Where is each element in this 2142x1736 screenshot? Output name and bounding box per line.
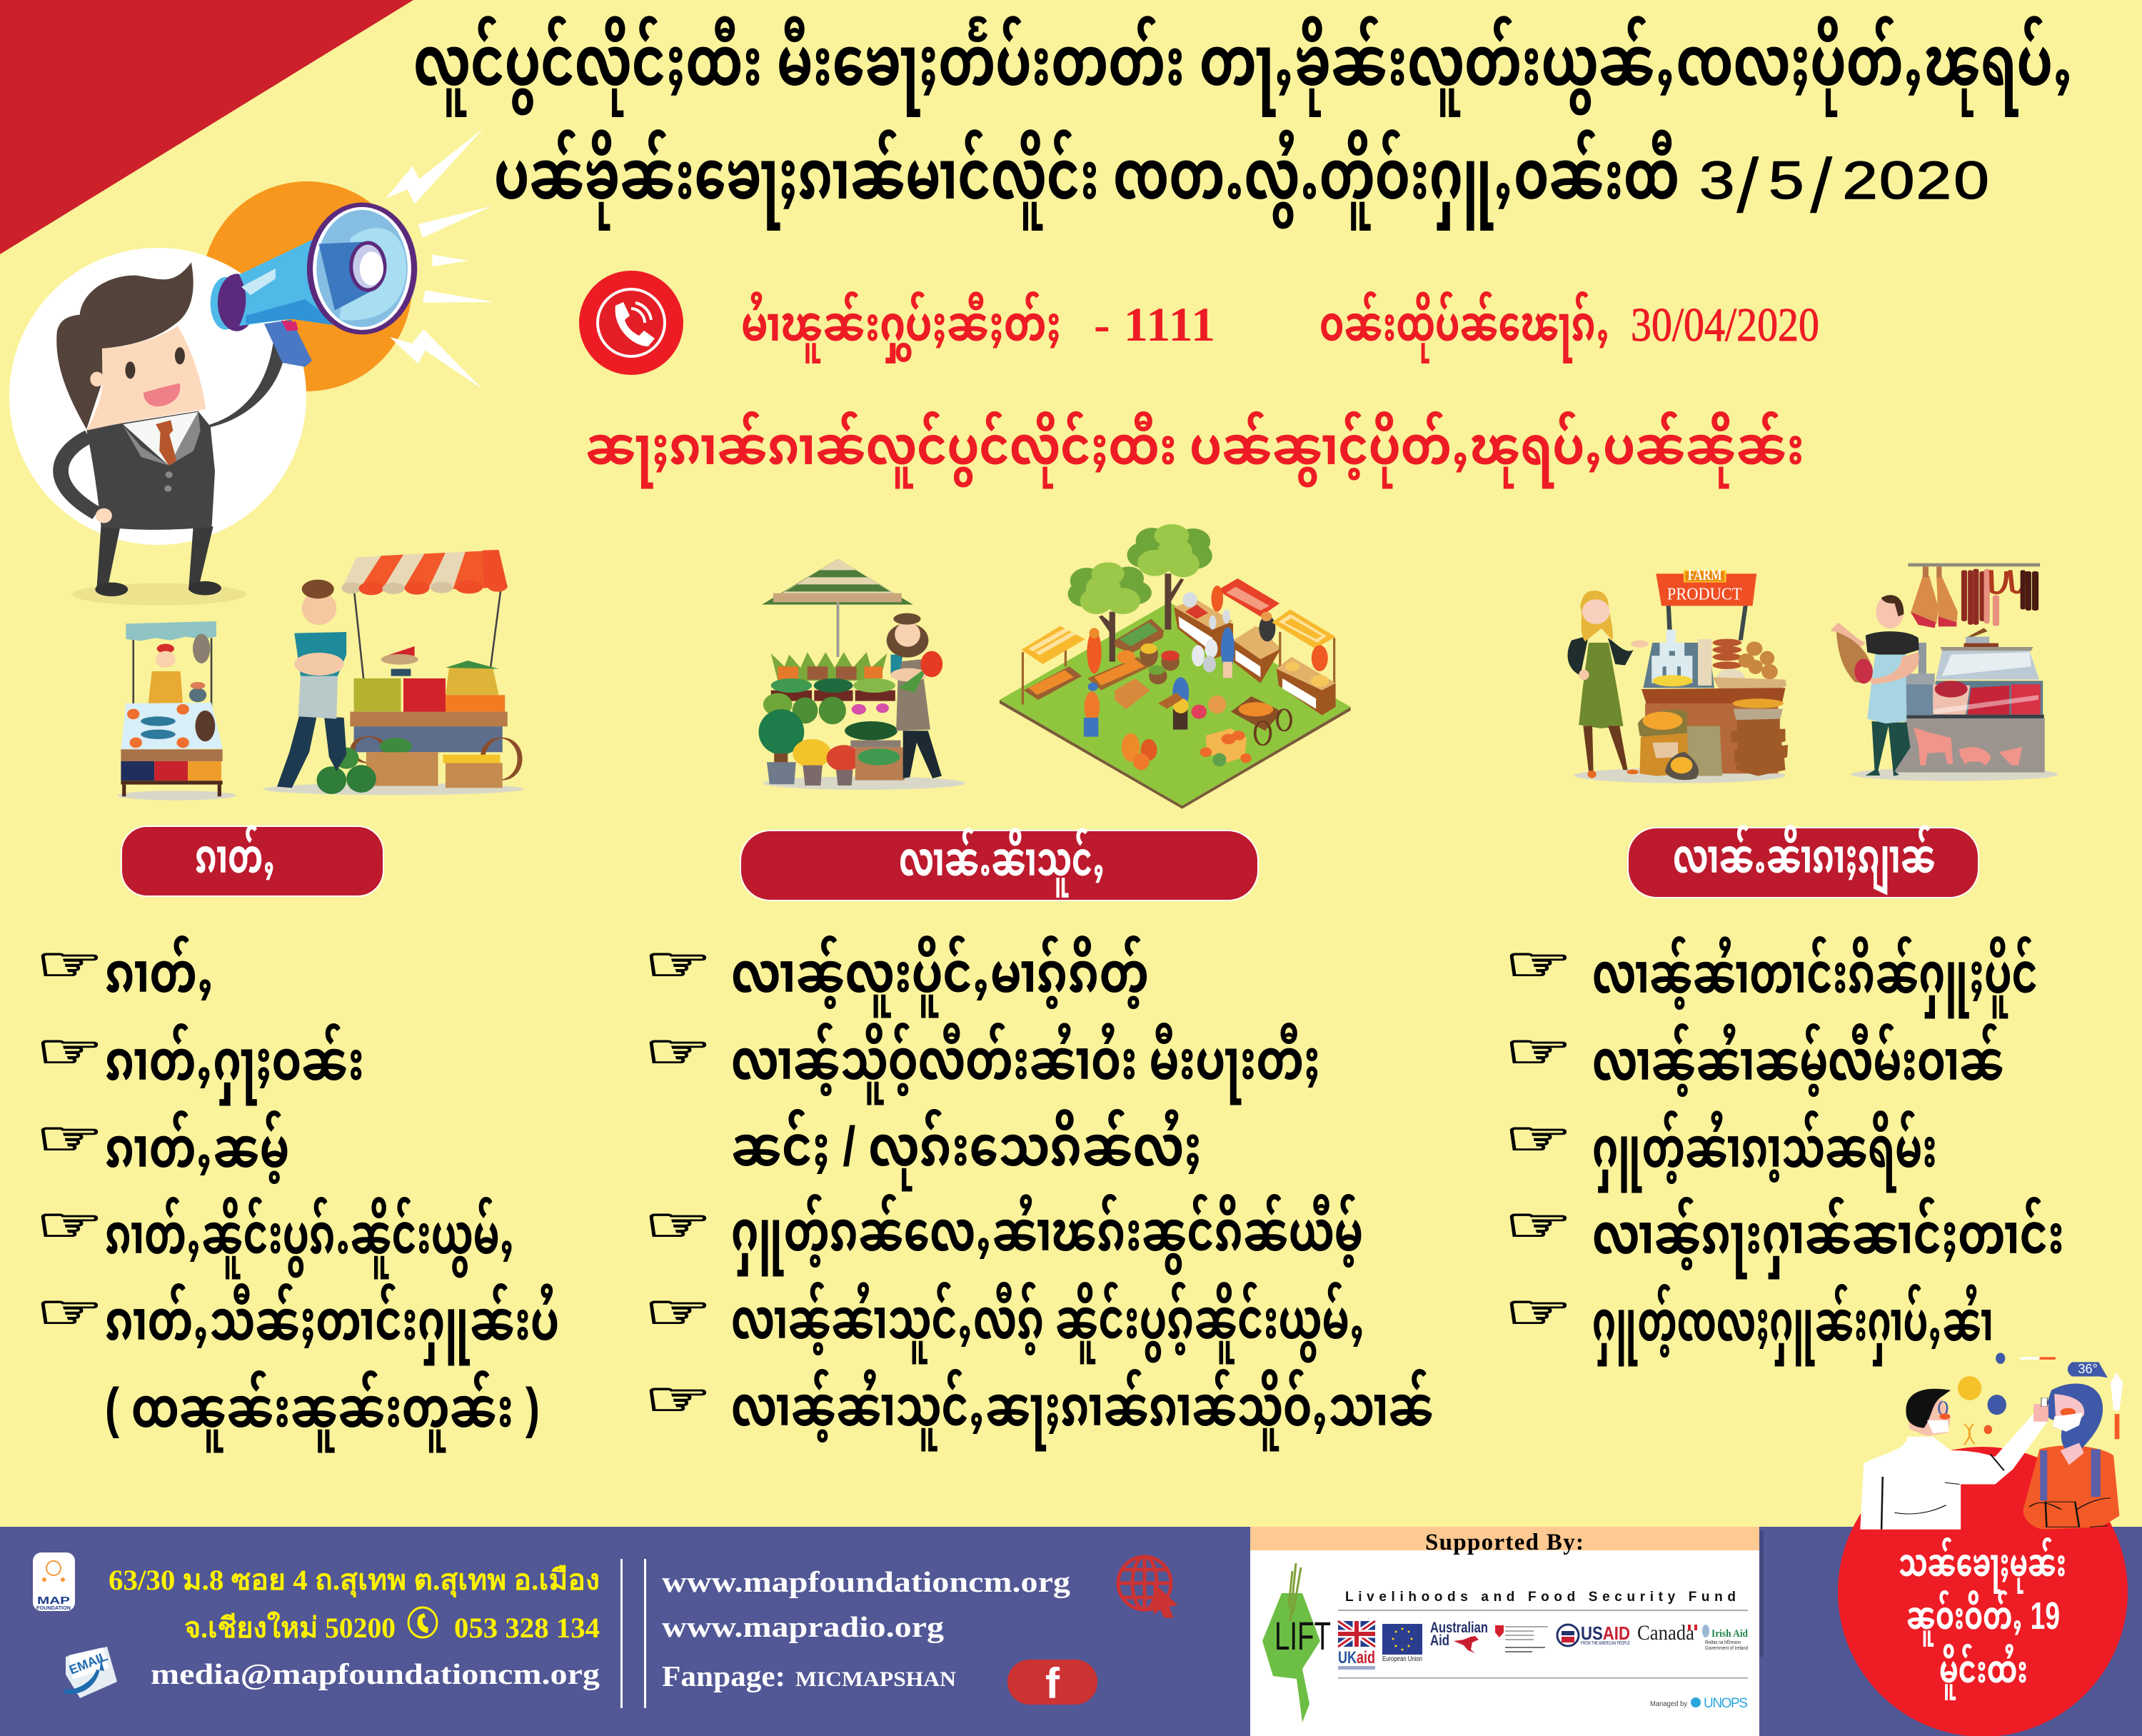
managed by UNOPS <box>1650 1696 1748 1711</box>
badge text <box>1899 1537 2066 1700</box>
title <box>413 15 2073 231</box>
illustration: temperature screening <box>1860 1353 2123 1530</box>
illustration: flower stall <box>759 559 965 790</box>
red corner triangle <box>0 0 413 254</box>
illustration: farm product stall: FARM <box>1688 566 1722 584</box>
red subheading: ၼႃႈၵၢၼ်ၵၢၼ်လူင်ပွင်လိုင်ႈထီး ပၼ်ၼွၢင့်ပိုတ်ႇၽုရပ်ႇပၼ်ၼိုၼ်း <box>585 411 1804 488</box>
hand bullet: ☞ <box>36 1023 104 1079</box>
badge line 1: သၼ်ၶေႃႈမုၼ်း <box>1899 1537 2066 1594</box>
title date: / <box>1736 143 1759 229</box>
footer: MAP logo <box>33 1552 75 1611</box>
title date: 352020 <box>1699 151 1989 210</box>
date text: ဝၼ်းထိုပ်ၼ်ၽေႃၵ်ႇ <box>1319 291 1610 363</box>
pill: other goods label <box>1628 824 1978 898</box>
footer: website 1: www.mapfoundationcm.org <box>662 1565 1071 1598</box>
footer: address line 2: 053 328 134 <box>454 1612 600 1644</box>
hotline text: မႆၢၽူၼ်းႁွပ်ႈၼီႈတ်ႈ <box>741 291 1061 363</box>
hand bullet: ☞ <box>1504 1284 1572 1340</box>
footer: fanpage: MICMAPSHAN <box>795 1667 956 1691</box>
USAID logo: FROM THE AMERICAN PEOPLE <box>1581 1641 1630 1646</box>
hand bullet: ☞ <box>1504 1023 1572 1079</box>
hotline text <box>741 291 1215 363</box>
item: ၵၢတ်ႇၼမ့် <box>105 1110 289 1184</box>
hand bullet: ☞ <box>36 1110 104 1166</box>
icon: facebook badge <box>1007 1660 1097 1707</box>
pill: vegetables label: လၢၼ်ႉၼိၢသူင်ႇ <box>899 827 1105 898</box>
item: ၵၢတ်ႇၼိူင်းပွၵ်ႉၼိူင်းယွမ်ႇ <box>105 1196 515 1280</box>
Irish Aid logo: Irish Aid <box>1711 1628 1749 1640</box>
pill: fish label: ၵၢတ်ႇ <box>195 824 276 883</box>
footer: fanpage: Fanpage: <box>662 1660 785 1692</box>
hand bullet: ☞ <box>1504 1197 1572 1253</box>
footer dividers <box>620 1559 623 1708</box>
footer: address line 1: 63/30 ม.8 ซอย 4 ถ.สุเทพ ต.สุเทพ อ.เมือง <box>109 1564 600 1598</box>
hand bullet: ☞ <box>1504 936 1572 992</box>
item: လၢၼ့်ၼႆၢသူင်ႇလီၵ့် ၼိူင်းပွၵ့်ၼိူင်းယွမ်ႇ <box>731 1281 1365 1365</box>
Irish Aid logo <box>1702 1625 1749 1651</box>
illustration: fruit and vegetable cart <box>263 550 523 795</box>
Australian Aid logo <box>1430 1620 1488 1653</box>
footer: MAP logo: MAP <box>37 1595 70 1607</box>
footer: website 2: www.mapradio.org <box>662 1610 945 1643</box>
footer: address line 2: จ.เชียงใหม่ 50200 <box>184 1611 396 1644</box>
hand bullet: ☞ <box>36 936 104 992</box>
hand bullet: ☞ <box>644 1197 712 1253</box>
Swiss logo <box>1495 1625 1548 1652</box>
pill: other goods label: လၢၼ်ႉၼိၢၵၢႈၵျၢၼ် <box>1673 824 1936 895</box>
USAID logo <box>1557 1622 1630 1646</box>
footer: fanpage <box>662 1660 956 1692</box>
icon: phone badge <box>579 271 683 375</box>
red circle badge <box>1838 1447 2128 1736</box>
list: column 1 <box>36 935 559 1453</box>
panel: supported by <box>1250 1527 1764 1736</box>
item: လၢၼ့်သိူဝ့်လီတ်းၼႆၢဝႆး မီးပႃးတီႈ <box>731 1022 1320 1105</box>
item: ၵၢတ်ႇႁႃႈဝၼ်း <box>105 1023 364 1106</box>
icon: LIFT map <box>1262 1563 1320 1722</box>
white circle <box>9 248 306 545</box>
badge line 2: ၼူဝ်းဝိတ်ႇ 19 <box>1906 1590 2060 1647</box>
item: ႁူတ့်ၼႆၢၵၢ့သ်ၼရိမ်း <box>1592 1110 1937 1193</box>
footer: MAP logo: FOUNDATION <box>36 1606 71 1611</box>
item continuation: ( ထၼူၼ်းၼူၼ်းတူၼ်း ) <box>105 1370 540 1453</box>
icon: globe cursor <box>1118 1557 1174 1616</box>
hand bullet: ☞ <box>36 1284 104 1340</box>
USAID logo: USAID <box>1581 1622 1630 1644</box>
hand bullet: ☞ <box>644 936 712 992</box>
UK aid logo <box>1338 1621 1375 1670</box>
footer band <box>0 1527 2142 1736</box>
title line 2: ပၼ်ၶိုၼ်းၶေႃႈၵၢၼ်မၢင်လိူင်း ၸတႉလွႆႉတိူဝ်းႁူႇဝၼ်းထီ <box>494 129 1679 231</box>
item: ၵၢတ်ႇသီၼ်ႈတၢင်းႁူၼ်းပႆ <box>105 1283 559 1366</box>
illustration: temperature screening: 36° <box>2078 1361 2098 1376</box>
Irish Aid logo: Rialtas na hÉireann <box>1705 1639 1741 1645</box>
EU logo <box>1382 1624 1422 1663</box>
managed by UNOPS: Managed by <box>1650 1700 1687 1708</box>
list: column 3 <box>1504 935 2064 1367</box>
illustration: isometric farmers market <box>1000 524 1351 809</box>
hand bullet: ☞ <box>644 1023 712 1079</box>
hand bullet: ☞ <box>1504 1110 1572 1166</box>
pill: fish label <box>121 824 383 896</box>
UK aid logo: UKaid <box>1338 1648 1375 1667</box>
item: လၢၼ့်ၼႆၢသူင်ႇၼႃႈၵၢၼ်ၵၢၼ်သိူဝ်ႇသၢၼ် <box>731 1368 1434 1452</box>
item: ႁူတ့်ၵၼ်လေႇၼႆၢၽၵ်းၼွင်ၵိၼ်ယီမ့် <box>731 1193 1363 1277</box>
EU logo: European Union <box>1382 1655 1422 1663</box>
Irish Aid logo: Government of Ireland <box>1705 1646 1748 1651</box>
Australian Aid logo: Aid <box>1430 1632 1449 1649</box>
managed by UNOPS: UNOPS <box>1704 1696 1748 1711</box>
illustration: fish stall <box>117 621 236 801</box>
item continuation: ၼင်ႈ / လုၵ်းသေၵိၼ်လႆႈ <box>731 1108 1202 1192</box>
supported by heading: Supported By: <box>1425 1530 1584 1555</box>
illustration: farm product stall <box>1568 566 1788 783</box>
fund name: Livelihoods and Food Security Fund <box>1345 1590 1736 1605</box>
footer: email: media@mapfoundationcm.org <box>151 1657 600 1690</box>
icon: man with megaphone <box>56 129 494 606</box>
list: column 2 <box>644 935 1434 1452</box>
pill: vegetables label <box>740 827 1258 900</box>
date text <box>1319 291 1819 363</box>
Australian Aid logo: Australian <box>1430 1620 1488 1636</box>
hand bullet: ☞ <box>36 1197 104 1253</box>
title date: / <box>1810 143 1833 229</box>
footer: address line 2 <box>184 1607 600 1644</box>
Canada logo: Canada <box>1637 1621 1694 1645</box>
item: ၵၢတ်ႇ <box>105 935 214 1004</box>
hotline text: - 1111 <box>1094 297 1215 351</box>
icon: facebook badge: f <box>1045 1660 1060 1707</box>
item: လၢၼ့်လူးပိူင်ႇမၢၵ့်ၵိတ့် <box>731 935 1149 1018</box>
hand bullet: ☞ <box>644 1284 712 1340</box>
icon: email envelope <box>63 1647 117 1698</box>
orange circle <box>202 181 412 391</box>
item: လၢၼ့်ၼႆၢၼမ့်လီမ်းဝၢၼ် <box>1592 1023 2004 1097</box>
illustration: farm product stall: PRODUCT <box>1667 584 1742 603</box>
illustration: butcher stall <box>1830 563 2058 781</box>
date text: 30/04/2020 <box>1631 298 1819 351</box>
icon: email envelope: EMAIL <box>67 1649 109 1677</box>
LIFT wordmark: LIFT <box>1274 1613 1331 1658</box>
title date <box>1699 143 1989 229</box>
hand bullet: ☞ <box>644 1371 712 1427</box>
badge line 3: မိူင်းထႆး <box>1939 1643 2028 1700</box>
